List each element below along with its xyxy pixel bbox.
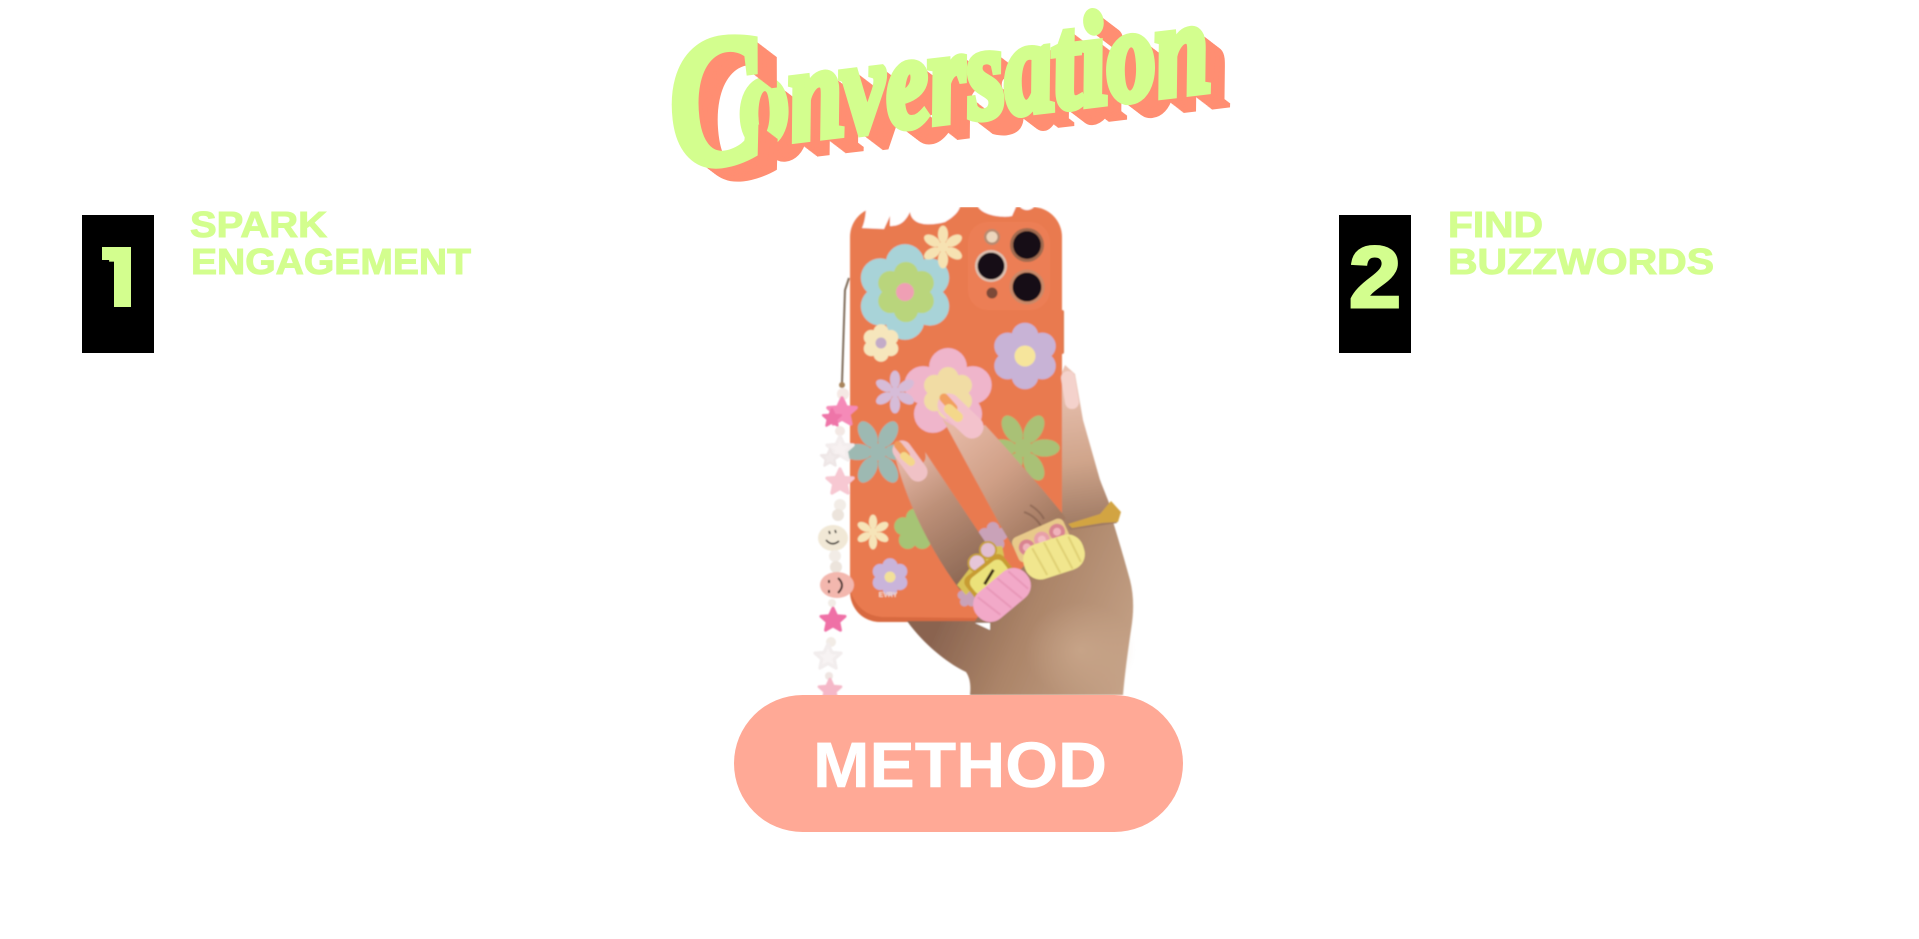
step 2 label: BUZZWORDS <box>1448 241 1714 282</box>
method pill button <box>734 695 1183 832</box>
camera island <box>974 228 1046 306</box>
method pill button: METHOD <box>813 729 1107 801</box>
step 1 number box: 1 <box>104 212 136 331</box>
step 1 label: ENGAGEMENT <box>191 241 471 282</box>
step 2 label: FIND <box>1448 204 1543 245</box>
white lettering remnant at the top of the phone <box>862 207 1034 229</box>
rings: gold gem pair <box>956 540 1012 598</box>
phone charm strap <box>815 278 856 699</box>
photo: hand holding flowered phone <box>815 207 1135 699</box>
hand <box>893 365 1135 698</box>
step 2 number box <box>1339 215 1411 353</box>
ring: gold on little finger <box>1068 501 1121 528</box>
ring: yellow twist <box>1022 534 1086 580</box>
phone flowers <box>848 224 1060 608</box>
step 2 number box: 2 <box>1349 230 1401 326</box>
step 1 number box <box>82 212 154 353</box>
step 1 label: SPARK <box>190 204 327 245</box>
brand mark on case: EVRY <box>879 592 898 599</box>
phone case <box>850 207 1064 622</box>
ring: pink twist <box>972 566 1032 623</box>
ring: hearts <box>1010 517 1072 564</box>
nails <box>898 378 1072 472</box>
